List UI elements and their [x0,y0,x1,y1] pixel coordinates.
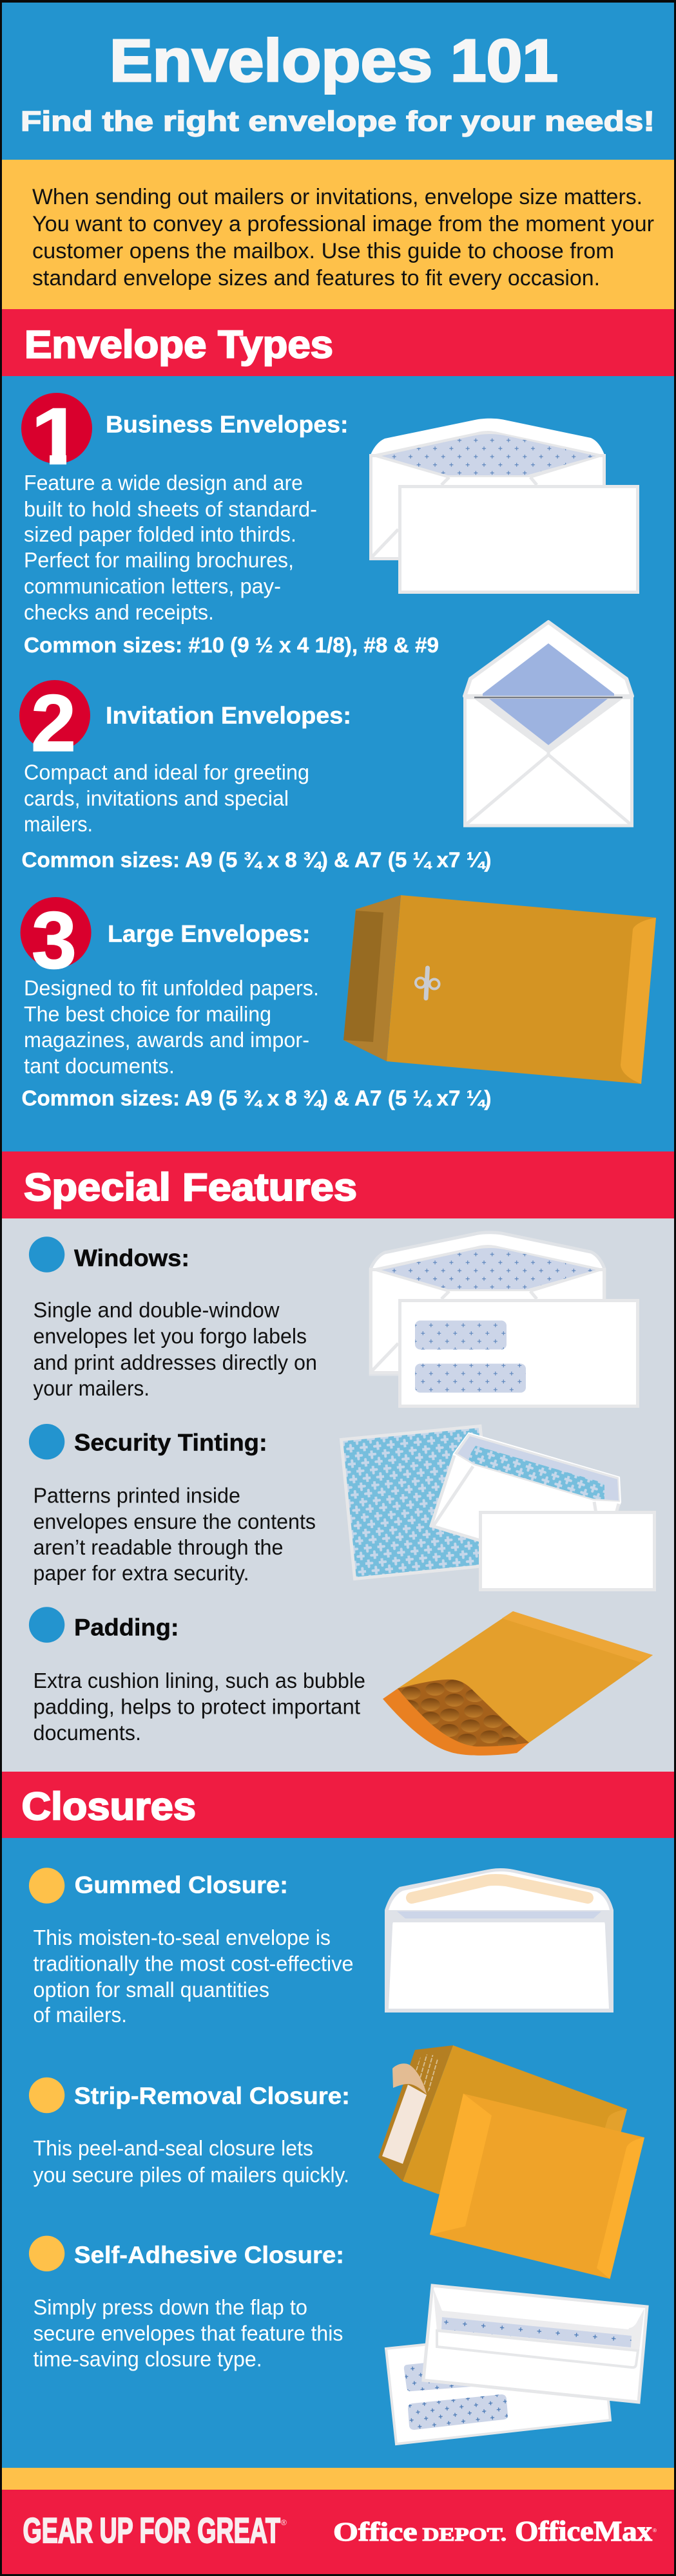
text: padding description: documents. [34,1721,141,1745]
number badge 2: 2 [31,679,76,768]
text: strip-removal closure description [34,2136,349,2187]
text: padding description [34,1669,365,1745]
text: business common sizes: Common sizes: #10 (9 ½ x 4 1/8), #8 & #9 [24,633,439,657]
text: invitation common sizes: Common sizes: A9 (5 ¾ x 8 ¾) & A7 (5 ¼ x7 ¼) [22,848,491,872]
number badge 1: 1 [31,392,82,482]
panel: footer: GEAR UP FOR GREAT [23,2510,280,2550]
number badge 3: 3 [32,896,77,985]
text: large common sizes: Common sizes: A9 (5 ¾ x 8 ¾) & A7 (5 ¼ x7 ¼) [22,1086,491,1110]
text: security tinting description: paper for extra security. [34,1561,249,1585]
panel: envelope types background [2,376,674,1151]
text: padding description: padding, helps to protect important [34,1695,360,1718]
bullet: windows [29,1236,64,1273]
subtitle: Find the right envelope for your needs! [21,106,655,137]
panel: introduction: You want to convey a professional image from the moment your [32,212,654,236]
text: business envelopes description: checks and receipts. [24,600,214,624]
number badge 1 [21,393,92,465]
icon: security tinted envelopes [342,1426,655,1589]
heading: security tinting: Security Tinting: [74,1429,267,1455]
panel: header background [2,3,674,160]
bullet: security tinting [29,1424,64,1459]
panel: footer: ® [281,2518,287,2527]
number badge 3 [21,896,92,985]
text: business envelopes description: built to hold sheets of standard- [24,497,317,521]
text: large envelopes description [24,976,319,1078]
text: self-adhesive closure description: secure envelopes that feature this [34,2321,343,2345]
text: business envelopes description [24,471,317,624]
text: gummed closure description: option for small quantities [34,1978,269,2002]
text: security tinting description: aren’t readable through the [34,1535,284,1559]
text: security tinting description: envelopes ensure the contents [34,1510,316,1533]
heading: windows: Windows: [74,1245,189,1271]
panel: closures background [2,1838,674,2468]
text: windows description [34,1298,317,1400]
panel: introduction: customer opens the mailbox. Use this guide to choose from [32,239,614,263]
panel: envelope types heading: Envelope Types [24,323,333,366]
icon: self-adhesive envelopes [386,2286,647,2444]
text: self-adhesive closure description: time-saving closure type. [34,2347,262,2371]
panel: introduction: standard envelope sizes and features to fit every occasion. [32,266,600,290]
text: business envelopes description: communication letters, pay- [24,574,281,598]
text: strip-removal closure description: This peel-and-seal closure lets [34,2136,313,2160]
text: security tinting description [34,1484,316,1585]
text: invitation envelopes description: Compact and ideal for greeting [24,760,309,784]
panel: special features heading: Special Features [24,1166,357,1209]
panel: footer: DEPOT. [423,2524,507,2545]
panel: footer: Office [333,2517,418,2546]
bullet: gummed closure [29,1868,64,1904]
icon: strip-removal envelopes [378,2045,644,2279]
icon: bubble-padded envelope [383,1611,653,1756]
yellow footer band [2,2468,674,2490]
text: windows description: and print addresses directly on [34,1350,317,1374]
text: security tinting description: Patterns printed inside [34,1484,240,1508]
text: strip-removal closure description: you secure piles of mailers quickly. [34,2163,349,2187]
panel: footer: ® [653,2528,657,2533]
text: invitation envelopes description [24,760,309,836]
icon: invitation envelope [465,622,632,826]
heading: self-adhesive closure: Self-Adhesive Closure: [74,2242,344,2268]
panel: closures heading: Closures [22,1785,196,1828]
text: windows description: envelopes let you forgo labels [34,1324,307,1348]
icon: gummed envelope [385,1868,613,2012]
panel: introduction [2,160,674,309]
text: gummed closure description [34,1926,353,2027]
bullet: strip-removal closure [29,2078,64,2113]
text: invitation envelopes description: mailers. [24,812,93,836]
panel: envelope types heading [2,309,674,376]
bullet: padding [29,1607,64,1643]
panel: introduction: When sending out mailers or invitations, envelope size matters. [32,185,642,209]
panel: footer [2,2490,674,2574]
text: large envelopes description: tant documents. [24,1054,175,1078]
text: gummed closure description: This moisten-to-seal envelope is [34,1926,331,1949]
text: large envelopes description: magazines, awards and impor- [24,1028,309,1052]
text: windows description: Single and double-window [34,1298,280,1322]
panel: special features heading [2,1151,674,1218]
text: large envelopes description: The best choice for mailing [24,1002,271,1026]
bullet: self-adhesive closure [29,2236,64,2271]
text: padding description: Extra cushion lining, such as bubble [34,1669,365,1692]
heading: business envelopes: Business Envelopes: [106,411,348,438]
text: large envelopes description: Designed to fit unfolded papers. [24,976,319,999]
text: gummed closure description: of mailers. [34,2003,127,2027]
icon: window envelopes [369,1233,638,1406]
heading: large envelopes: Large Envelopes: [108,921,310,947]
heading: invitation envelopes: Invitation Envelopes: [106,702,351,729]
icon: business envelopes [369,419,638,592]
text: business envelopes description: Feature a wide design and are [24,471,303,495]
heading: padding: Padding: [74,1614,179,1641]
panel: footer: OfficeMax [515,2515,652,2547]
text: self-adhesive closure description: Simply press down the flap to [34,2295,307,2319]
text: windows description: your mailers. [34,1376,150,1400]
text: gummed closure description: traditionally the most cost-effective [34,1952,353,1976]
heading: strip-removal closure: Strip-Removal Closure: [74,2083,350,2109]
panel: closures heading [2,1772,674,1838]
heading: gummed closure: Gummed Closure: [75,1872,288,1899]
text: invitation envelopes description: cards, invitations and special [24,786,289,810]
icon: large clasp envelope [343,895,656,1084]
panel: special features background [2,1218,674,1772]
title: Envelopes 101 [110,27,558,94]
text: self-adhesive closure description [34,2295,343,2371]
text: business envelopes description: sized paper folded into thirds. [24,522,296,546]
text: business envelopes description: Perfect for mailing brochures, [24,548,294,572]
number badge 2 [19,679,90,768]
